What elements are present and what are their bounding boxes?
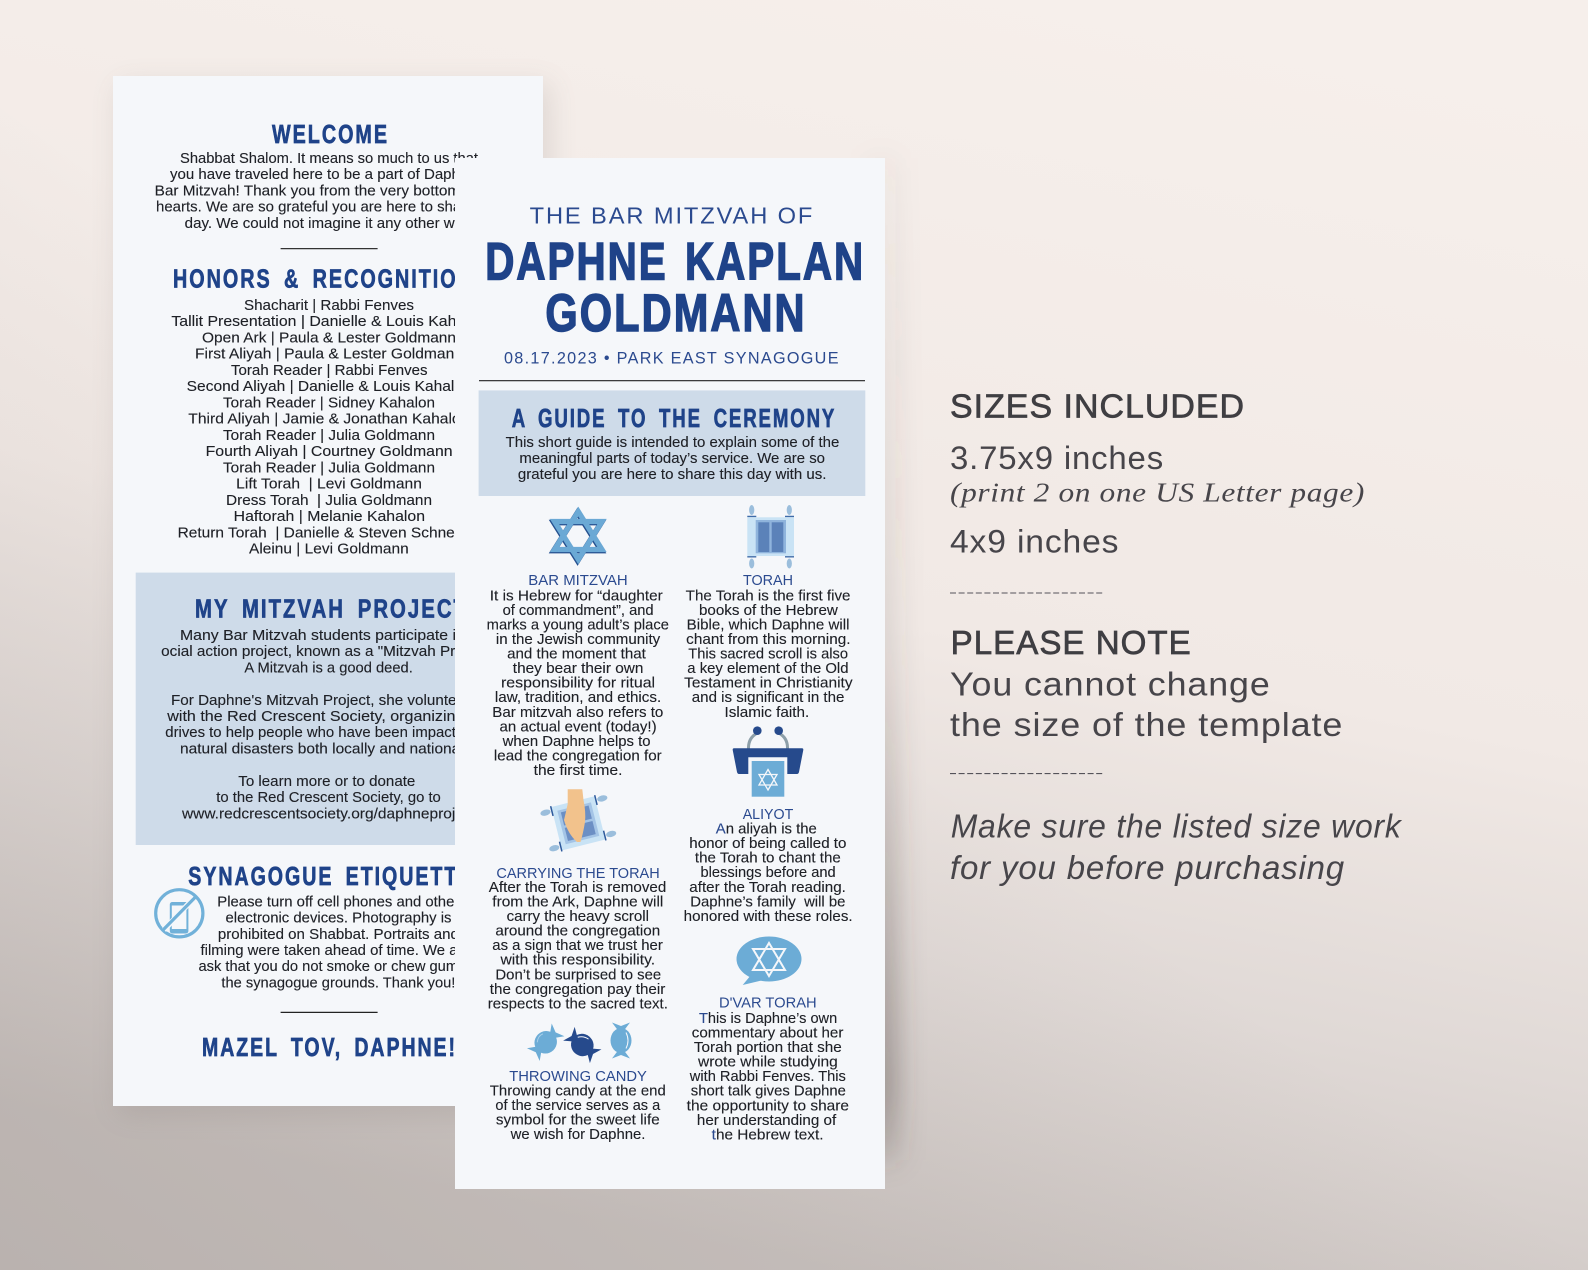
label: aliyot: ALIYOT (743, 806, 793, 823)
section: aliyot (684, 726, 853, 925)
icon: speech bubble (736, 936, 802, 985)
text block: carrying the torah: respects to the sacred text. (488, 996, 668, 1012)
note: template size: the size of the template (950, 706, 1343, 743)
subtitle: date and venue: 08.17.2023 • PARK EAST SYNAGOGUE (504, 350, 840, 368)
text block: torah: books of the Hebrew (699, 603, 839, 619)
text block: bar mitzvah: the first time. (534, 763, 622, 779)
text block: welcome message: day. We could not imagine it any other way. (185, 216, 474, 232)
text block: torah (684, 588, 854, 721)
text block: torah: Bible, which Daphne will (687, 618, 850, 634)
text block: torah: Islamic faith. (724, 705, 809, 721)
text block: honors list: Haftorah | Melanie Kahalon (234, 509, 425, 525)
text block: project description: to the Red Crescent Society, go to (216, 790, 441, 806)
text block: torah: and is significant in the (692, 690, 844, 706)
text block: bar mitzvah: an actual event (today!) (500, 719, 657, 735)
text block: honors list: Second Aliyah | Danielle & Louis Kahalon (187, 379, 472, 395)
text block: etiquette: prohibited on Shabbat. Portraits and (218, 927, 459, 943)
icon: no phones (156, 890, 203, 937)
text block: honors list: Shacharit | Rabbi Fenves (244, 298, 414, 314)
text block: d'var torah: the opportunity to share (687, 1098, 849, 1114)
heading: synagogue etiquette: SYNAGOGUE ETIQUETTE (188, 861, 473, 891)
text block: honors list: Aleinu | Levi Goldmann (249, 542, 409, 558)
text block: welcome message: hearts. We are so grateful you are here to share this (156, 200, 502, 216)
text block: project description: Many Bar Mitzvah students participate in a (180, 628, 479, 644)
text block: project description: with the Red Crescent Society, organizing aid (166, 709, 490, 725)
text block: honors list: Tallit Presentation | Danielle & Louis Kahalon (171, 314, 486, 330)
text block: honors list: Return Torah | Danielle & Steven Schneider (178, 525, 481, 541)
icon: hand on scroll (539, 789, 617, 854)
panel: guide intro (479, 390, 865, 496)
heading: welcome: WELCOME (272, 119, 389, 149)
text block: throwing candy: we wish for Daphne. (510, 1127, 645, 1143)
text block: honors list: Torah Reader | Julia Goldmann (223, 460, 435, 476)
text block: carrying the torah: Don’t be surprised to see (495, 967, 661, 983)
label: torah: TORAH (743, 572, 793, 589)
text block: sizes included (950, 388, 1365, 560)
text block: etiquette (198, 894, 478, 991)
text block: honors list: Third Aliyah | Jamie & Jonathan Kahalon (188, 412, 469, 428)
text block: carrying the torah: After the Torah is removed (489, 880, 666, 896)
note: print 2 on one page: (print 2 on one US Letter page) (950, 478, 1365, 508)
text block: d'var torah (687, 1011, 849, 1143)
title: name line 1: DAPHNE KAPLAN (485, 233, 865, 292)
label: bar mitzvah: BAR MITZVAH (528, 572, 628, 589)
text block: etiquette: ask that you do not smoke or chew gum on (198, 959, 478, 975)
heading: sizes included: SIZES INCLUDED (950, 388, 1245, 424)
text block: welcome message: Shabbat Shalom. It means so much to us that (180, 151, 478, 167)
text block: bar mitzvah: Bar mitzvah also refers to (492, 705, 663, 721)
label: throwing candy: THROWING CANDY (509, 1068, 647, 1085)
text block: d'var torah: wrote while studying (697, 1055, 838, 1071)
text block: etiquette: electronic devices. Photography is (226, 911, 452, 927)
text block: carrying the torah: as a sign that we trust her (492, 938, 663, 954)
text block: aliyot (684, 822, 853, 925)
text block: throwing candy: of the service serves as a (495, 1098, 660, 1114)
text block: throwing candy: symbol for the sweet life (496, 1113, 660, 1129)
text block: aliyot: the Torah to chant the (695, 851, 841, 867)
section: bar mitzvah (487, 512, 669, 779)
text block: carrying the torah (488, 880, 668, 1012)
advice line 1: Make sure the listed size work (951, 808, 1402, 845)
text block: aliyot: after the Torah reading. (689, 880, 846, 896)
text block: guide intro: grateful you are here to share this day with us. (518, 467, 826, 483)
text block: bar mitzvah: and the moment that (507, 647, 646, 663)
text block: bar mitzvah: responsibility for ritual (501, 676, 655, 692)
text block: project description: drives to help people who have been impacted by (165, 725, 493, 741)
text block: aliyot: blessings before and (700, 865, 836, 881)
text block: guide intro: meaningful parts of today’s service. We are so (519, 451, 825, 467)
section: torah (684, 505, 854, 721)
advice line 2: for you before purchasing (950, 849, 1345, 886)
text block: honors list (171, 298, 486, 558)
section: throwing candy (490, 1022, 666, 1143)
panel: back card (program) (113, 76, 550, 1114)
panel: my mitzvah project (136, 573, 523, 845)
text block: project description: ocial action project, known as a "Mitzvah Project." (161, 644, 497, 660)
text block: etiquette: Please turn off cell phones and other (217, 894, 459, 910)
size: 4x9 inches: 4x9 inches (950, 524, 1119, 560)
text block: d'var torah: the Hebrew text. (712, 1127, 824, 1143)
text block: bar mitzvah: marks a young adult’s place (487, 618, 669, 634)
text block: carrying the torah: the congregation pay their (490, 982, 666, 998)
text block: throwing candy (490, 1084, 666, 1143)
text block: torah: This sacred scroll is also (688, 647, 848, 663)
text block: bar mitzvah: in the Jewish community (496, 632, 661, 648)
size: 3.75x9 inches: 3.75x9 inches (950, 440, 1164, 476)
text block: etiquette: the synagogue grounds. Thank you! (221, 975, 455, 991)
text block: project description: For Daphne's Mitzvah Project, she volunteered (171, 693, 487, 709)
note: size cannot change: You cannot change (950, 665, 1271, 702)
text block: honors list: Torah Reader | Sidney Kahalon (223, 395, 435, 411)
text block: please note (950, 624, 1343, 743)
text block: bar mitzvah: law, tradition, and ethics. (495, 690, 661, 706)
text block: carrying the torah: from the Ark, Daphne will (492, 894, 663, 910)
icon: star of david (554, 512, 602, 561)
text block: d'var torah: commentary about her (692, 1026, 844, 1042)
text block: throwing candy: Throwing candy at the end (490, 1084, 666, 1100)
text block: carrying the torah: with this responsibility. (499, 953, 655, 969)
text block: project description: To learn more or to donate (238, 774, 415, 790)
text block: torah: a key element of the Old (687, 661, 849, 677)
text block: purchase advice (950, 808, 1402, 886)
icon: podium (733, 726, 803, 797)
text block: bar mitzvah: It is Hebrew for “daughter (490, 588, 663, 604)
text block: aliyot: honor of being called to (689, 836, 846, 852)
text block: bar mitzvah (487, 588, 669, 779)
text block: etiquette: filming were taken ahead of time. We also (200, 943, 476, 959)
text block: aliyot: Daphne’s family will be (690, 894, 845, 910)
text block: honors list: Dress Torah | Julia Goldmann (226, 493, 432, 509)
panel: front card (guide) (455, 158, 896, 1189)
text block: d'var torah: Torah portion that she (694, 1040, 842, 1056)
heading: mazel tov: MAZEL TOV, DAPHNE! (202, 1032, 457, 1062)
text block: aliyot: honored with these roles. (684, 909, 853, 925)
text block: welcome message: you have traveled here to be a part of Daphne's (170, 167, 487, 183)
text block: welcome message (155, 151, 504, 232)
text block: torah: The Torah is the first five (686, 588, 851, 604)
title: the bar mitzvah of: THE BAR MITZVAH OF (530, 203, 814, 229)
text block: project description: A Mitzvah is a good deed. (244, 660, 413, 676)
text block: d'var torah: short talk gives Daphne (691, 1084, 846, 1100)
heading: please note: PLEASE NOTE (951, 624, 1192, 661)
text block: honors list: Open Ark | Paula & Lester Goldmann (202, 330, 456, 346)
text block: d'var torah: with Rabbi Fenves. This (689, 1069, 846, 1085)
heading: honors and recognitions: HONORS & RECOGNITIONS (173, 264, 489, 294)
section: d'var torah (687, 936, 849, 1143)
label: carrying the torah: CARRYING THE TORAH (496, 865, 660, 882)
text block: bar mitzvah: of commandment”, and (503, 603, 654, 619)
text block: bar mitzvah: they bear their own (513, 661, 643, 677)
text block: project description: www.redcrescentsociety.org/daphneproject (181, 806, 476, 822)
text block: d'var torah: her understanding of (697, 1113, 836, 1129)
text block: torah: Testament in Christianity (684, 676, 854, 692)
text block: project description: natural disasters both locally and nationally. (180, 742, 478, 758)
title: name line 2: GOLDMANN (545, 284, 807, 343)
label: d'var torah: D'VAR TORAH (719, 994, 817, 1012)
text block: guide intro: This short guide is intended to explain some of the (506, 435, 839, 451)
text block: carrying the torah: carry the heavy scroll (507, 909, 649, 925)
text block: bar mitzvah: when Daphne helps to (502, 734, 651, 750)
text block: honors list: Torah Reader | Rabbi Fenves (231, 363, 428, 379)
text block: honors list: Lift Torah | Levi Goldmann (236, 477, 422, 493)
text block: welcome message: Bar Mitzvah! Thank you from the very bottom of our (155, 183, 504, 199)
text block: honors list: Fourth Aliyah | Courtney Goldmann (206, 444, 453, 460)
section: carrying the torah (488, 789, 668, 1012)
text block: aliyot: An aliyah is the (716, 822, 817, 838)
heading: a guide to the ceremony: A GUIDE TO THE CEREMONY (512, 403, 836, 433)
text block: bar mitzvah: lead the congregation for (494, 748, 662, 764)
text block: guide intro (506, 435, 839, 483)
icon: torah scroll (747, 505, 794, 568)
icon: candies (526, 1022, 632, 1065)
text block: project description (161, 628, 497, 822)
text block: carrying the torah: around the congregation (495, 924, 660, 940)
text block: torah: chant from this morning. (686, 632, 850, 648)
text block: honors list: First Aliyah | Paula & Lester Goldmann (195, 347, 463, 363)
heading: my mitzvah project: MY MITZVAH PROJECT (195, 594, 468, 624)
text block: d'var torah: This is Daphne’s own (699, 1011, 837, 1027)
text block: honors list: Torah Reader | Julia Goldmann (223, 428, 435, 444)
